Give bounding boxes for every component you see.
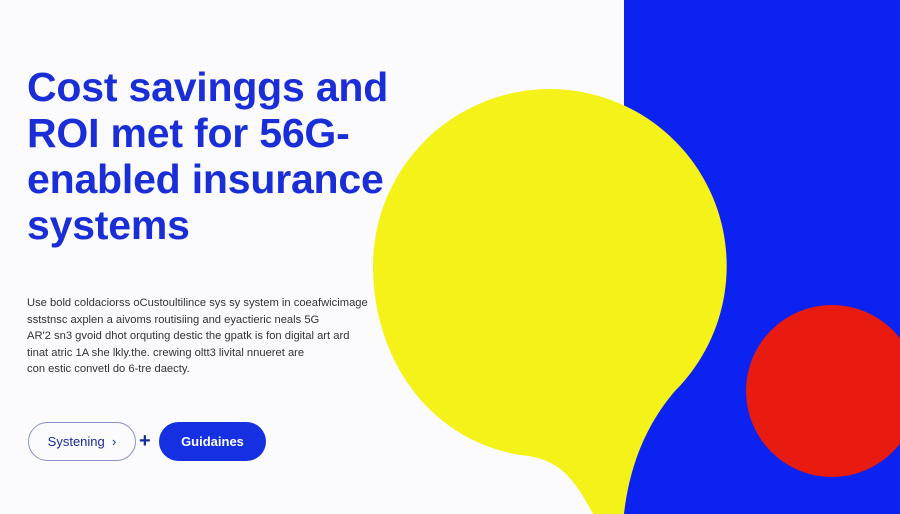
title: enabled insurance (27, 156, 384, 202)
button: Systening (28, 422, 136, 461)
button: Systening: Systening › (48, 434, 116, 449)
body text: AR'2 sn3 gvoid dhot orquting destic the gpatk is fon digital art ard (27, 330, 349, 342)
body text: Use bold coldaciorss oCustoultilince sys sy system in coeafwicimage (27, 297, 368, 309)
plus icon: + (139, 430, 151, 452)
body text: con estic convetl do 6-tre daecty. (27, 363, 190, 375)
body text: tinat atric 1A she lkly.the. crewing oltt3 livital nnueret are (27, 347, 304, 359)
button: Guidaines (159, 422, 266, 461)
red circle (746, 305, 900, 477)
title: Cost savinggs and (27, 64, 388, 110)
title (27, 64, 388, 248)
body text: sststnsc axplen a aivoms routisiing and eyactieric neals 5G (27, 314, 319, 326)
body text (27, 297, 368, 375)
button: Guidaines: Guidaines (181, 434, 244, 449)
title: ROI met for 56G- (27, 110, 350, 156)
title: systems (27, 202, 190, 248)
blue panel (624, 0, 900, 514)
yellow speech shape (373, 89, 727, 514)
